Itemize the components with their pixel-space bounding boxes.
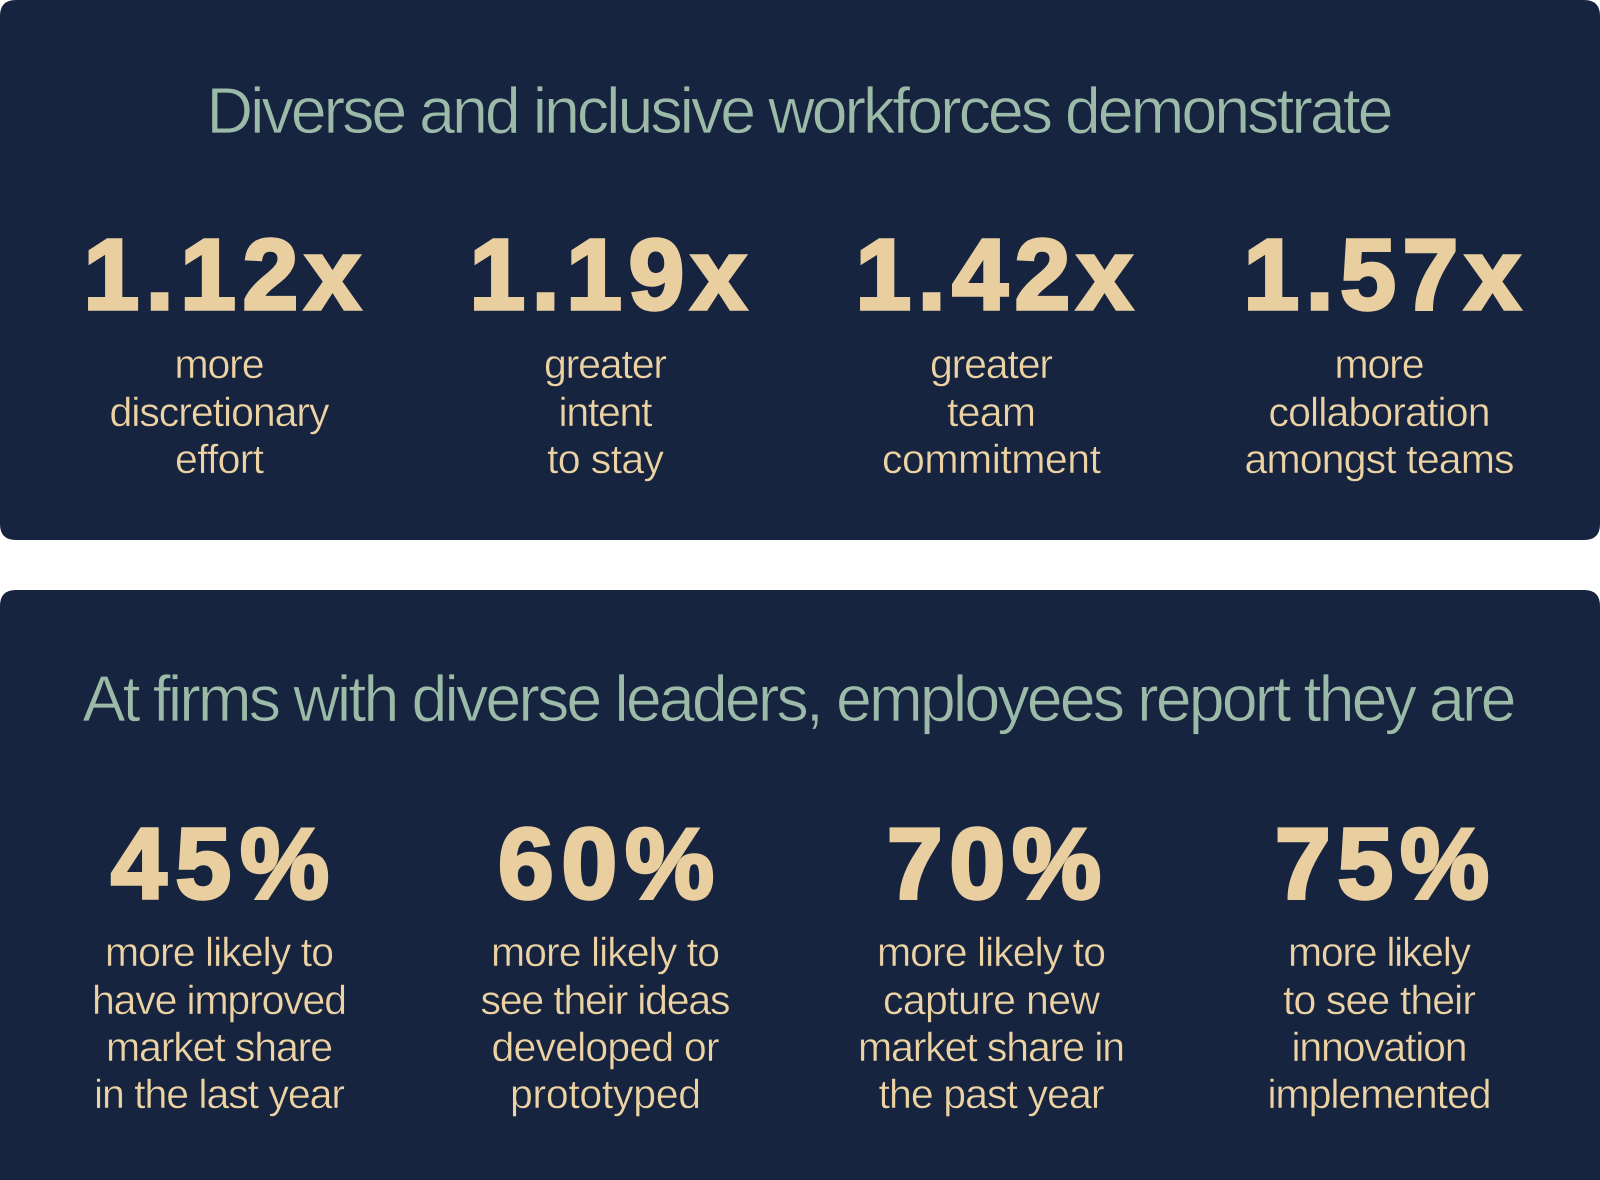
stat: 70%: market share in: [858, 1024, 1125, 1070]
stat: 60%: prototyped: [510, 1071, 701, 1117]
panel: leaders: [0, 590, 1600, 1180]
stat: 60%: more likely to: [491, 929, 720, 975]
stat: 1.19x: [470, 219, 746, 482]
stat: 1.57x: amongst teams: [1244, 436, 1514, 482]
stat: 1.12x: more: [174, 341, 264, 387]
stat: 1.57x: collaboration: [1268, 389, 1490, 435]
stat: 75%: implemented: [1268, 1071, 1492, 1117]
panel background: [0, 0, 1600, 540]
stat: 1.57x: more: [1334, 341, 1424, 387]
stat: 1.42x: [856, 219, 1132, 482]
heading: At firms with diverse leaders, employees report they are: [82, 663, 1516, 735]
heading: Diverse and inclusive workforces demonstrate: [206, 75, 1394, 147]
stat: 45%: [92, 808, 347, 1117]
stat: 75%: innovation: [1292, 1024, 1468, 1070]
stat: 70%: capture new: [883, 977, 1100, 1023]
panel background: [0, 590, 1600, 1180]
stat: 70%: the past year: [878, 1071, 1104, 1117]
stat: 1.42x: commitment: [882, 436, 1102, 482]
stat: 1.19x: to stay: [547, 436, 664, 482]
stat: 45%: in the last year: [94, 1071, 345, 1117]
stat: 75%: 75%: [1275, 808, 1489, 920]
stat: 1.12x: [84, 219, 360, 482]
stat: 1.19x: 1.19x: [470, 219, 746, 331]
stat: 1.12x: effort: [175, 436, 265, 482]
stat: 75%: to see their: [1283, 977, 1476, 1023]
stat: 45%: 45%: [111, 808, 329, 920]
stat: 1.42x: team: [947, 389, 1036, 435]
stat: 60%: [480, 808, 730, 1117]
stat: 60%: see their ideas: [480, 977, 730, 1023]
stat: 1.57x: 1.57x: [1244, 219, 1520, 331]
stat: 60%: developed or: [492, 1024, 720, 1070]
stat: 45%: market share: [106, 1024, 333, 1070]
panel: workforces: [0, 0, 1600, 540]
stat: 1.42x: 1.42x: [856, 219, 1132, 331]
stat: 75%: [1268, 808, 1492, 1117]
stat: 75%: more likely: [1288, 929, 1472, 975]
stat: 70%: [858, 808, 1125, 1117]
stat: 45%: have improved: [92, 977, 347, 1023]
stat: 1.42x: greater: [930, 341, 1053, 387]
stat: 70%: 70%: [887, 808, 1101, 920]
stat: 1.12x: 1.12x: [84, 219, 360, 331]
stat: 70%: more likely to: [877, 929, 1106, 975]
stat: 1.12x: discretionary: [110, 389, 330, 435]
stat: 1.19x: intent: [558, 389, 653, 435]
stat: 60%: 60%: [498, 808, 714, 920]
stat: 1.19x: greater: [544, 341, 667, 387]
stat: 1.57x: [1244, 219, 1520, 482]
stat: 45%: more likely to: [105, 929, 334, 975]
